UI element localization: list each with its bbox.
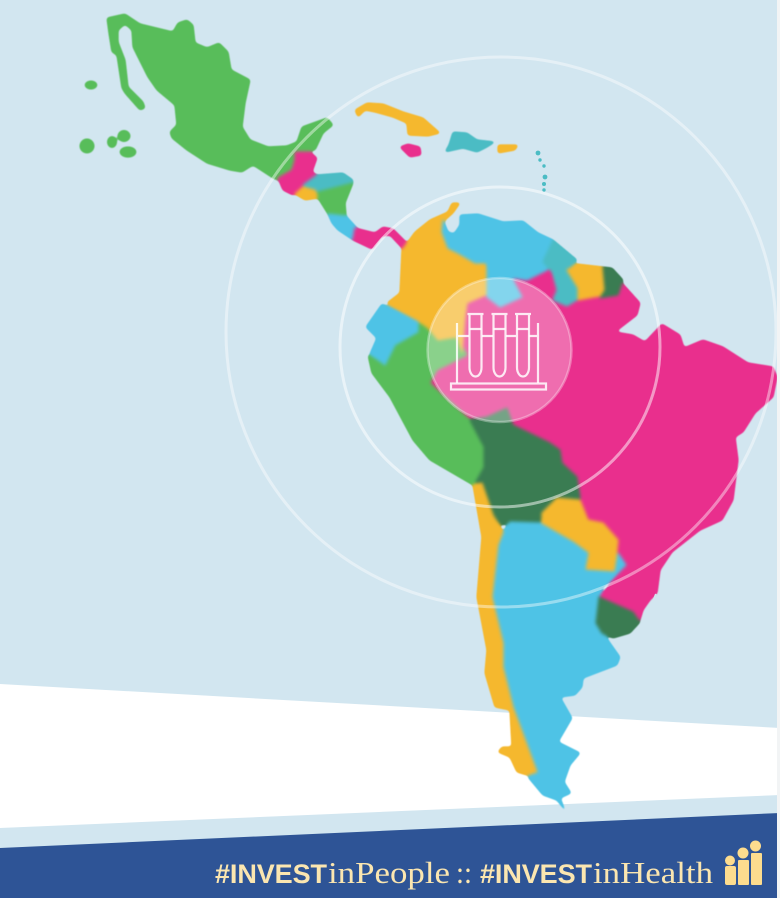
Mexico [80,14,333,180]
Chile [473,483,537,775]
footer hashtag text: inPeople [328,855,450,890]
Guatemala [278,152,317,195]
Brazil [430,270,777,620]
Paraguay [542,498,618,572]
footer hashtag text: #INVEST [215,859,328,889]
Suriname [567,264,605,300]
Puerto Rico [498,145,518,153]
footer hashtag text: #INVEST [480,859,592,889]
Nicaragua [318,183,353,215]
right edge strip [777,0,780,898]
map of Latin America [80,14,777,812]
icon: test tubes rack [451,314,546,390]
Colombia [387,203,490,353]
El Salvador [295,187,318,200]
footer hashtag text [215,855,714,890]
Costa Rica [328,214,357,240]
Panama [353,227,406,249]
footer hashtag text: :: [456,855,472,890]
Uruguay [596,597,640,638]
icon: people bars logo [725,840,762,885]
lagoon [651,594,656,607]
Hispaniola [445,132,495,152]
Ecuador [366,304,418,365]
French Guiana [600,267,623,298]
Peru [368,323,483,485]
center disc [428,278,572,422]
outer ring [226,57,776,607]
Cuba [355,103,440,136]
middle ring [340,187,660,507]
footer hashtag text: inHealth [593,855,714,890]
white diagonal band [0,684,780,828]
navy footer band [0,813,780,898]
Venezuela [442,214,553,307]
Guyana [543,240,578,306]
Jamaica [400,144,421,157]
Argentina [492,522,626,812]
Bolivia [470,408,580,525]
Honduras [303,173,353,192]
Lesser Antilles [536,151,547,192]
